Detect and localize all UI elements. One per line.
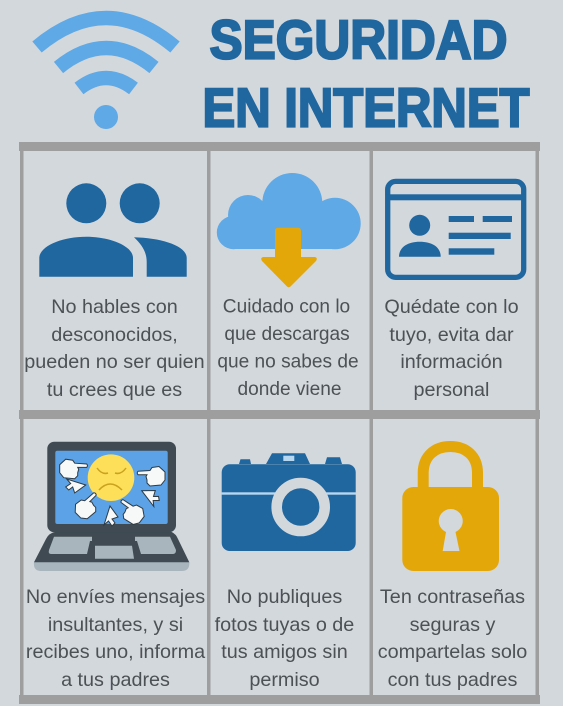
text: contraseñas	[378, 586, 527, 691]
icon: wifi	[37, 18, 175, 129]
icon: camera	[221, 453, 356, 551]
text: descargas	[217, 296, 359, 400]
text: fotos: No publiques	[227, 586, 342, 608]
text: fotos: fotos tuyas o de	[215, 614, 354, 636]
text: descargas: que no sabes de	[217, 352, 359, 372]
text: desconocidos: tu crees que es	[47, 379, 182, 401]
icon: laptop with sad face	[34, 442, 189, 571]
text: desconocidos: desconocidos,	[51, 324, 178, 346]
text: fotos: tus amigos sin	[221, 641, 348, 663]
text: personal: personal	[414, 379, 489, 401]
icon: id card	[387, 181, 525, 277]
text: mensajes	[26, 586, 205, 691]
text: desconocidos: pueden no ser quien	[24, 351, 205, 373]
text: contraseñas: seguras y	[410, 614, 495, 636]
text: personal	[384, 296, 519, 401]
text: fotos	[215, 586, 354, 691]
text: desconocidos: No hables con	[51, 296, 178, 318]
text: descargas: que descargas	[224, 324, 350, 345]
text: mensajes: recibes uno, informa	[26, 641, 205, 663]
icon: cloud download	[217, 173, 361, 287]
icon: two people	[39, 183, 187, 277]
text: fotos: permiso	[249, 669, 320, 691]
text: descargas: Cuidado con lo	[223, 296, 350, 318]
icon: padlock	[402, 446, 499, 571]
text: personal: información	[400, 351, 503, 373]
text: mensajes: insultantes, y si	[48, 614, 183, 636]
text: contraseñas: con tus padres	[388, 669, 517, 691]
text: desconocidos	[24, 296, 205, 401]
title: SEGURIDAD	[210, 8, 508, 70]
table grid	[19, 142, 540, 704]
title: EN INTERNET	[202, 76, 530, 138]
text: contraseñas: Ten contraseñas	[380, 586, 525, 608]
title	[202, 8, 530, 138]
text: mensajes: No envíes mensajes	[26, 586, 205, 608]
text: descargas: donde viene	[237, 379, 342, 400]
text: mensajes: a tus padres	[61, 669, 170, 691]
text: personal: tuyo, evita dar	[389, 324, 514, 346]
text: contraseñas: compartelas solo	[378, 641, 527, 663]
text: personal: Quédate con lo	[384, 296, 519, 318]
